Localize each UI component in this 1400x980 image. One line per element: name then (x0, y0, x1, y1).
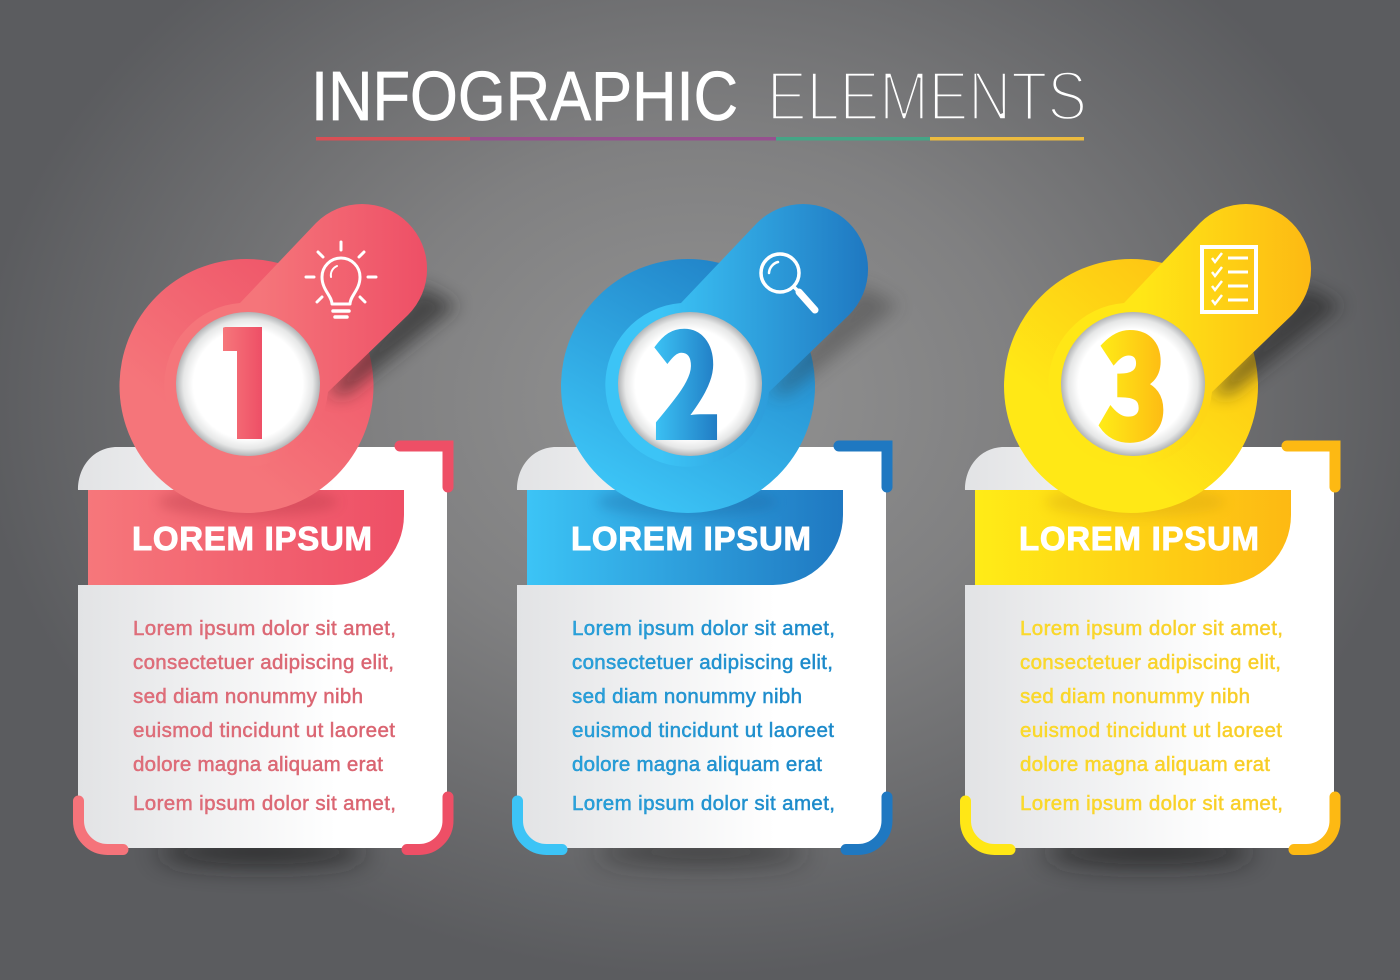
title: INFOGRAPHIC (311, 57, 738, 135)
corner brackets (965, 446, 1335, 850)
body text: sed diam nonummy nibh (1020, 685, 1250, 708)
number 3: 3 (1099, 273, 1167, 479)
number hole (176, 312, 320, 456)
body text: Lorem ipsum dolor sit amet, (572, 792, 835, 815)
body text: euismod tincidunt ut laoreet (133, 719, 395, 742)
capsule shadow (769, 285, 899, 395)
capsule with ring (1048, 204, 1311, 467)
icon: checklist (1202, 247, 1256, 312)
capsule shadow (328, 285, 458, 395)
title (311, 57, 1087, 135)
header text: LOREM IPSUM (571, 520, 811, 557)
body text: dolore magna aliquam erat (133, 753, 383, 776)
header band (975, 490, 1291, 585)
card and header (965, 446, 1335, 850)
body text: consectetuer adipiscing elit, (572, 651, 833, 674)
capsule shadow (1212, 285, 1342, 395)
number hole (1061, 312, 1205, 456)
body text: euismod tincidunt ut laoreet (1020, 719, 1282, 742)
header text: LOREM IPSUM (1019, 520, 1259, 557)
body text: consectetuer adipiscing elit, (1020, 651, 1281, 674)
card shadow (1044, 839, 1254, 865)
body text (572, 617, 835, 815)
panel: step 1 (78, 204, 458, 865)
card shadow (596, 839, 806, 865)
capsule with ring (164, 204, 427, 467)
header band (527, 490, 843, 585)
body text: consectetuer adipiscing elit, (133, 651, 394, 674)
body text: Lorem ipsum dolor sit amet, (572, 617, 835, 640)
circle shadow on band (598, 490, 771, 518)
circle (1004, 259, 1258, 513)
number 2: 2 (653, 270, 721, 480)
panel: step 2 (517, 204, 899, 865)
body text: dolore magna aliquam erat (1020, 753, 1270, 776)
body text: Lorem ipsum dolor sit amet, (133, 792, 396, 815)
body text: euismod tincidunt ut laoreet (572, 719, 834, 742)
corner brackets (517, 446, 887, 850)
circle shadow on band (1048, 492, 1219, 518)
body text: sed diam nonummy nibh (133, 685, 363, 708)
card shadow (157, 839, 367, 865)
capsule with ring (605, 204, 868, 467)
panel: step 3 (965, 204, 1342, 865)
card (78, 447, 447, 848)
title underline in four colours (316, 137, 1084, 140)
body text (1020, 617, 1283, 815)
body text: Lorem ipsum dolor sit amet, (133, 617, 396, 640)
body text: dolore magna aliquam erat (572, 753, 822, 776)
circle (120, 259, 374, 513)
header text: LOREM IPSUM (132, 520, 372, 557)
body text: Lorem ipsum dolor sit amet, (1020, 617, 1283, 640)
body text (133, 617, 396, 815)
corner brackets (78, 446, 448, 850)
title: ELEMENTS (767, 57, 1087, 135)
body text: sed diam nonummy nibh (572, 685, 802, 708)
body text: Lorem ipsum dolor sit amet, (1020, 792, 1283, 815)
circle shadow on band (158, 487, 338, 517)
header band (88, 490, 404, 585)
icon: light bulb (306, 242, 376, 317)
circle, capsule and icon (561, 204, 899, 513)
number hole (618, 312, 762, 456)
icon: magnifier (761, 254, 815, 310)
card and header (517, 446, 887, 850)
number 1: 1 (199, 267, 289, 482)
